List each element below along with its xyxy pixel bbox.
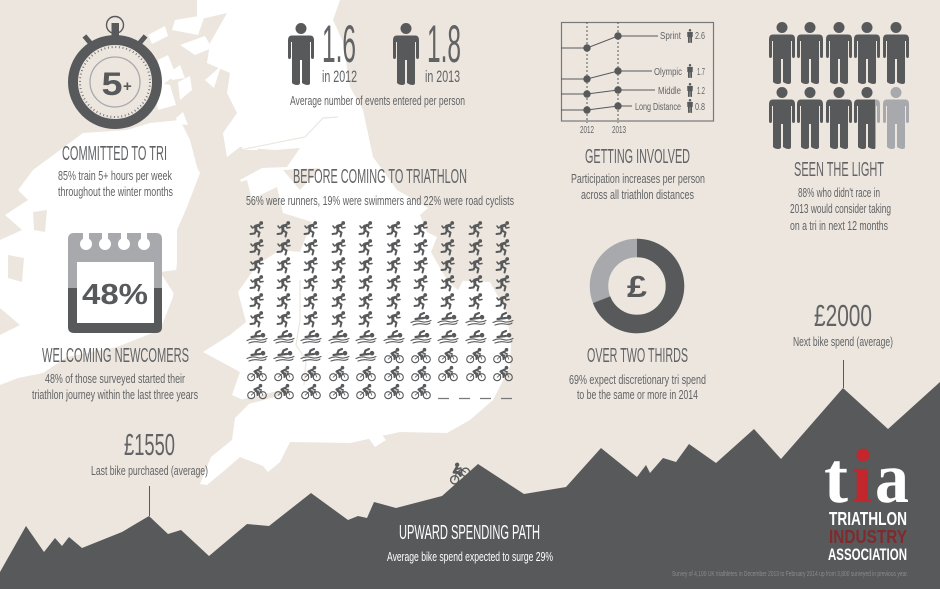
logo: tia bbox=[824, 438, 909, 564]
logo: tia: TRIATHLON bbox=[829, 509, 907, 529]
line chart: getting involved: Olympic bbox=[654, 66, 682, 78]
text: getting involved: Participation increases per person bbox=[571, 171, 705, 186]
logo: tia: INDUSTRY bbox=[829, 527, 907, 547]
text: committed to tri bbox=[58, 168, 173, 199]
logo: tia: a bbox=[875, 438, 909, 518]
heading: over two thirds: OVER TWO THIRDS bbox=[587, 345, 688, 367]
line chart: getting involved bbox=[561, 22, 714, 136]
chart: donut 69% bbox=[599, 248, 675, 324]
text: welcoming newcomers: 48% of those surveyed started their bbox=[45, 371, 185, 386]
stat: last bike purchased bbox=[91, 427, 208, 478]
icon: calendar: 48% bbox=[82, 279, 148, 311]
text: over two thirds: to be the same or more in 2014 bbox=[577, 387, 698, 402]
logo: tia: ı bbox=[851, 438, 873, 518]
stat: events 2013 bbox=[393, 15, 461, 86]
stat: last bike purchased: Last bike purchased (average) bbox=[91, 463, 208, 478]
text: 1.8 bbox=[427, 15, 461, 74]
pictogram grid: runners, swimmers, cyclists bbox=[247, 221, 513, 399]
icon: stopwatch bbox=[73, 16, 157, 124]
stat: events 2013: in 2013 bbox=[425, 67, 460, 86]
stat: last bike purchased: £1550 bbox=[124, 427, 175, 462]
line chart: getting involved: Middle bbox=[658, 85, 681, 97]
text: over two thirds bbox=[569, 372, 706, 402]
text: seen the light: on a tri in next 12 months bbox=[790, 218, 888, 233]
text: welcoming newcomers bbox=[32, 371, 198, 402]
line chart: getting involved: 1.2 bbox=[697, 85, 705, 97]
heading: getting involved: GETTING INVOLVED bbox=[585, 146, 690, 168]
text: seen the light bbox=[790, 185, 891, 233]
heading: before coming to triathlon: BEFORE COMING TO TRIATHLON bbox=[293, 166, 467, 188]
line chart: getting involved: Sprint bbox=[660, 30, 681, 42]
line chart: getting involved: 1.7 bbox=[697, 66, 705, 78]
chart: donut 69%: £ bbox=[627, 269, 647, 304]
text: getting involved bbox=[571, 171, 705, 202]
text: over two thirds: 69% expect discretionary tri spend bbox=[569, 372, 706, 387]
text: events caption: Average number of events entered per person bbox=[290, 93, 465, 108]
line chart: getting involved: 0.8 bbox=[695, 101, 705, 113]
text: before coming to triathlon: 56% were runners, 19% were swimmers and 22% were road cyclists bbox=[246, 193, 514, 208]
text: welcoming newcomers: triathlon journey within the last three years bbox=[32, 387, 198, 402]
icon: stopwatch: 5 bbox=[102, 66, 122, 102]
logo: tia: t bbox=[824, 438, 848, 518]
stat: events 2012 bbox=[288, 15, 357, 86]
text: committed to tri: 85% train 5+ hours per week bbox=[58, 168, 172, 183]
text: upward spending path: Average bike spend expected to surge 29% bbox=[387, 549, 553, 564]
mountains bbox=[0, 360, 940, 589]
heading: welcoming newcomers: WELCOMING NEWCOMERS bbox=[42, 345, 189, 367]
line chart: getting involved: Long Distance bbox=[635, 101, 681, 113]
text: getting involved: across all triathlon distances bbox=[581, 187, 694, 202]
text: seen the light: 88% who didn't race in bbox=[798, 185, 880, 200]
text: committed to tri: throughout the winter months bbox=[58, 184, 173, 199]
line chart: getting involved: 2.6 bbox=[695, 30, 705, 42]
stat: next bike spend: £2000 bbox=[814, 298, 872, 333]
map of the UK and Ireland bbox=[0, 0, 511, 485]
heading: committed to tri: COMMITTED TO TRI bbox=[62, 143, 167, 165]
text: 1.6 bbox=[322, 15, 356, 74]
stat: next bike spend bbox=[793, 298, 893, 349]
icon: cyclist on mountain bbox=[444, 459, 471, 485]
icon: people pictogram 88% bbox=[769, 22, 909, 149]
icon: stopwatch: + bbox=[123, 78, 132, 95]
line chart: getting involved: 2012 bbox=[580, 124, 594, 136]
heading: upward spending path: UPWARD SPENDING PATH bbox=[399, 522, 540, 544]
icon: calendar bbox=[68, 232, 162, 333]
line chart: getting involved: 2013 bbox=[612, 124, 626, 136]
stat: events 2012: in 2012 bbox=[322, 67, 357, 86]
